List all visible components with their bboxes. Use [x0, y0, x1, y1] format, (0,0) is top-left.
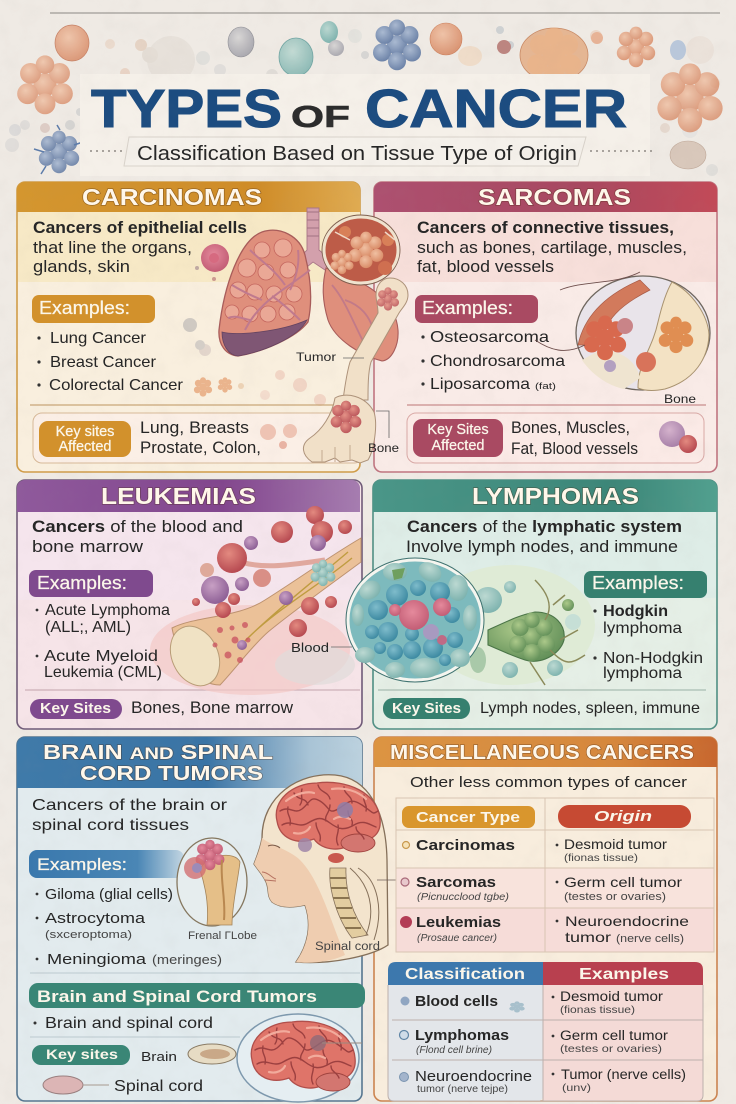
- text: leukemias description: bone marrow: [32, 537, 144, 556]
- panel: leukemias: [17, 480, 362, 729]
- key sites: sarcomas: Key Sites: [427, 422, 489, 438]
- list: leukemias examples: Leukemia (CML): [44, 664, 162, 681]
- row: neuroendocrine: [400, 1066, 686, 1095]
- title: [91, 79, 627, 139]
- row: leukemias: (Prosaue cancer): [417, 933, 497, 944]
- header: classification: Classification: [405, 966, 525, 983]
- row: sarcomas: Sarcomas: [416, 874, 496, 891]
- text: carcinomas description: [33, 218, 247, 276]
- label: tumor: Tumor: [296, 350, 336, 364]
- text: carcinomas description: glands, skin: [33, 257, 130, 276]
- text: lymphomas description: Involve lymph nodes, and immune: [406, 537, 678, 556]
- header: cancer type: [402, 806, 535, 828]
- text: miscellaneous subtitle: Other less common types of cancer: [410, 774, 687, 791]
- text: sarcomas description: Cancers of connective tissues,: [417, 218, 674, 237]
- text: leukemias description: Cancers of the blood and: [32, 517, 243, 536]
- row: leukemias: Neuroendocrine: [565, 913, 689, 929]
- key sites: carcinomas: Lung, Breasts: [140, 419, 249, 437]
- pill: lymphomas examples: [584, 571, 707, 598]
- list: brain examples: Meningioma: [47, 951, 147, 968]
- row: blood cells: Blood cells: [415, 993, 498, 1010]
- row: blood cells: Desmoid tumor: [560, 989, 664, 1004]
- key sites: leukemias: Bones, Bone marrow: [131, 699, 293, 717]
- row: leukemias: tumor: [565, 929, 611, 945]
- header: origin: Origin: [594, 808, 652, 825]
- row: lymphomas: (Flond cell brine): [416, 1045, 492, 1056]
- row: lymphomas: [400, 1027, 669, 1056]
- row: sarcomas: (Picnucclood tgbe): [417, 892, 509, 903]
- key sites: leukemias: [30, 699, 293, 719]
- list: sarcomas examples: Osteosarcoma: [430, 329, 549, 346]
- panel: brain and spinal cord tumors: [17, 737, 362, 1101]
- label: bone sarcoma: Bone: [664, 392, 696, 406]
- text: sarcomas description: [417, 218, 687, 276]
- key sites: brain: [32, 1044, 236, 1065]
- row: carcinomas: Desmoid tumor: [564, 837, 668, 852]
- key sites: carcinomas: Prostate, Colon,: [140, 439, 261, 457]
- text: brain description: spinal cord tissues: [32, 817, 189, 834]
- list: brain examples: Giloma (glial cells): [45, 886, 173, 903]
- key sites: carcinomas: Key sites: [56, 424, 114, 440]
- text: sarcomas description: such as bones, cartilage, muscles,: [417, 238, 687, 257]
- small cells: colorectal: [194, 377, 244, 397]
- row: lymphomas: (testes or ovaries): [560, 1043, 662, 1055]
- header decoration: cancer cells: [5, 13, 723, 176]
- text: lymphomas description: [406, 517, 682, 556]
- list: lymphomas examples: [593, 603, 703, 682]
- panel: lymphomas: [373, 480, 717, 729]
- key sites: spinal cord: [43, 1076, 203, 1095]
- text: sarcomas description: fat, blood vessels: [417, 257, 554, 276]
- subtitle: Classification Based on Tissue Type of Origin: [137, 143, 577, 165]
- list: brain examples: (sxceroptoma): [45, 929, 132, 941]
- heading: lymphomas: LYMPHOMAS: [472, 483, 639, 509]
- list: carcinomas examples: [37, 330, 184, 394]
- list: brain examples: [36, 886, 222, 968]
- label: blood: Blood: [291, 641, 329, 655]
- heading: miscellaneous cancers: MISCELLANEOUS CANCERS: [390, 741, 694, 764]
- row: neuroendocrine: Tumor (nerve cells): [561, 1066, 686, 1082]
- key sites: sarcomas: Affected: [432, 438, 484, 454]
- title: CANCER: [365, 79, 627, 139]
- row: leukemias: [400, 913, 689, 945]
- key sites: spinal cord: Spinal cord: [114, 1078, 203, 1095]
- list: carcinomas examples: Colorectal Cancer: [49, 377, 184, 394]
- panel: miscellaneous cancers: [374, 737, 717, 1101]
- pill: leukemias examples: [29, 570, 153, 597]
- header: cancer type: Cancer Type: [416, 809, 520, 826]
- illustration: lungs and bone: [219, 208, 408, 463]
- list: lymphomas examples: lymphoma: [603, 665, 682, 682]
- key sites: carcinomas: [39, 419, 261, 457]
- header: classification: [388, 962, 543, 985]
- table: classification and examples: [388, 962, 703, 1101]
- illustration: bone marrow and blood cells: [150, 506, 361, 695]
- label: tumor: [296, 350, 364, 364]
- list: lymphomas examples: Non-Hodgkin: [603, 650, 703, 667]
- pill: sarcomas examples: Examples:: [422, 298, 513, 318]
- list: brain examples: Astrocytoma: [45, 910, 146, 927]
- illustration: bone cross-section: [535, 272, 710, 390]
- key sites: brain: Key sites: [46, 1046, 118, 1062]
- heading: leukemias: LEUKEMIAS: [101, 483, 256, 509]
- text: leukemias description: [32, 517, 243, 556]
- list: sarcomas examples: Liposarcoma: [430, 376, 530, 393]
- key sites: leukemias: Key Sites: [40, 701, 111, 717]
- pill: sarcomas examples: [415, 295, 538, 323]
- pill: lymphomas examples: Examples:: [592, 573, 684, 593]
- heading: brain and spinal cord tumors: BRAIN AND SPINAL: [43, 741, 273, 764]
- panel: carcinomas: [17, 182, 363, 472]
- pill: brain examples: [29, 850, 184, 878]
- row: neuroendocrine: Neuroendocrine: [415, 1068, 532, 1085]
- list: sarcomas examples: [421, 329, 565, 393]
- illustration: head cross-section: [254, 775, 396, 963]
- list: leukemias examples: [36, 602, 170, 681]
- label: bone: [368, 411, 399, 455]
- label: frontal lobe: Frenal ΓLobe: [188, 930, 257, 942]
- list: lymphomas examples: lymphoma: [603, 620, 682, 637]
- row: lymphomas: Germ cell tumor: [560, 1028, 669, 1043]
- row: neuroendocrine: (unv): [562, 1082, 591, 1094]
- header band: [80, 74, 650, 176]
- row: blood cells: (fionas tissue): [560, 1004, 635, 1016]
- row: leukemias: (nerve cells): [616, 933, 684, 945]
- key sites: sarcomas: [413, 419, 697, 458]
- subtitle: [90, 137, 655, 166]
- row: carcinomas: [402, 837, 668, 864]
- heading: carcinomas: CARCINOMAS: [82, 184, 262, 210]
- key sites: lymphomas: [383, 698, 700, 719]
- text: lymphomas description: Cancers of the lymphatic system: [407, 517, 682, 536]
- row: carcinomas: Carcinomas: [416, 837, 515, 854]
- key sites: brain: Brain: [141, 1049, 177, 1064]
- title: TYPES: [91, 79, 282, 139]
- title: OF: [291, 99, 350, 134]
- label: blood: [291, 641, 352, 655]
- panel: sarcomas: [374, 182, 717, 472]
- small cell: carcinomas: [195, 244, 229, 281]
- text: brain description: Cancers of the brain or: [32, 797, 228, 814]
- illustration: brain circle: [237, 1014, 362, 1102]
- label: bone: Bone: [368, 441, 399, 455]
- row: leukemias: Leukemias: [416, 914, 501, 931]
- header: examples: Examples: [579, 966, 669, 983]
- list: carcinomas examples: Breast Cancer: [50, 354, 157, 371]
- pill: brain examples: Examples:: [37, 856, 127, 874]
- bar: brain and spinal cord tumors: [29, 983, 365, 1008]
- row: neuroendocrine: tumor (nerve tejpe): [417, 1084, 508, 1095]
- key sites: lymphomas: Lymph nodes, spleen, immune: [480, 700, 700, 717]
- list: sarcomas examples: Chondrosarcoma: [430, 353, 565, 370]
- pill: carcinomas examples: [32, 295, 155, 323]
- pill: carcinomas examples: Examples:: [39, 298, 130, 318]
- row: carcinomas: (fionas tissue): [564, 852, 638, 864]
- illustration: frontal lobe circle: [177, 838, 247, 926]
- list: leukemias examples: Acute Myeloid: [44, 648, 158, 665]
- row: blood cells: [400, 989, 664, 1016]
- key sites: sarcomas: Bones, Muscles,: [511, 419, 630, 437]
- list: sarcomas examples: (fat): [535, 381, 556, 391]
- text: carcinomas description: Cancers of epithelial cells: [33, 218, 247, 237]
- bar: brain and spinal cord tumors: Brain and Spinal Cord Tumors: [37, 987, 317, 1006]
- list: lymphomas examples: Hodgkin: [603, 603, 668, 620]
- text: brain description: [32, 797, 228, 834]
- key sites: lymphomas: Key Sites: [392, 701, 461, 717]
- list: leukemias examples: Acute Lymphoma: [45, 602, 170, 619]
- label: spinal cord: Spinal cord: [315, 941, 380, 953]
- row: lymphomas: Lymphomas: [415, 1027, 509, 1044]
- list: leukemias examples: (ALL;, AML): [45, 619, 131, 636]
- row: sarcomas: [401, 874, 682, 903]
- header: examples: [543, 962, 703, 985]
- header: origin: [558, 805, 691, 828]
- text: carcinomas description: that line the organs,: [33, 238, 192, 257]
- row: sarcomas: Germ cell tumor: [564, 874, 682, 890]
- heading: brain and spinal cord tumors: CORD TUMORS: [80, 762, 263, 785]
- key sites: carcinomas: Affected: [59, 439, 111, 455]
- text: brain and spinal cord: Brain and spinal cord: [45, 1015, 213, 1032]
- table: cancer type and origin: [396, 798, 714, 952]
- pill: leukemias examples: Examples:: [37, 573, 127, 593]
- heading: brain and spinal cord tumors: [43, 741, 273, 785]
- list: carcinomas examples: Lung Cancer: [50, 330, 147, 347]
- heading: sarcomas: SARCOMAS: [478, 184, 631, 210]
- key sites: sarcomas: Fat, Blood vessels: [511, 440, 638, 458]
- row: sarcomas: (testes or ovaries): [564, 891, 666, 903]
- list: brain examples: (meringes): [152, 953, 222, 967]
- illustration: lymph node: [346, 558, 595, 685]
